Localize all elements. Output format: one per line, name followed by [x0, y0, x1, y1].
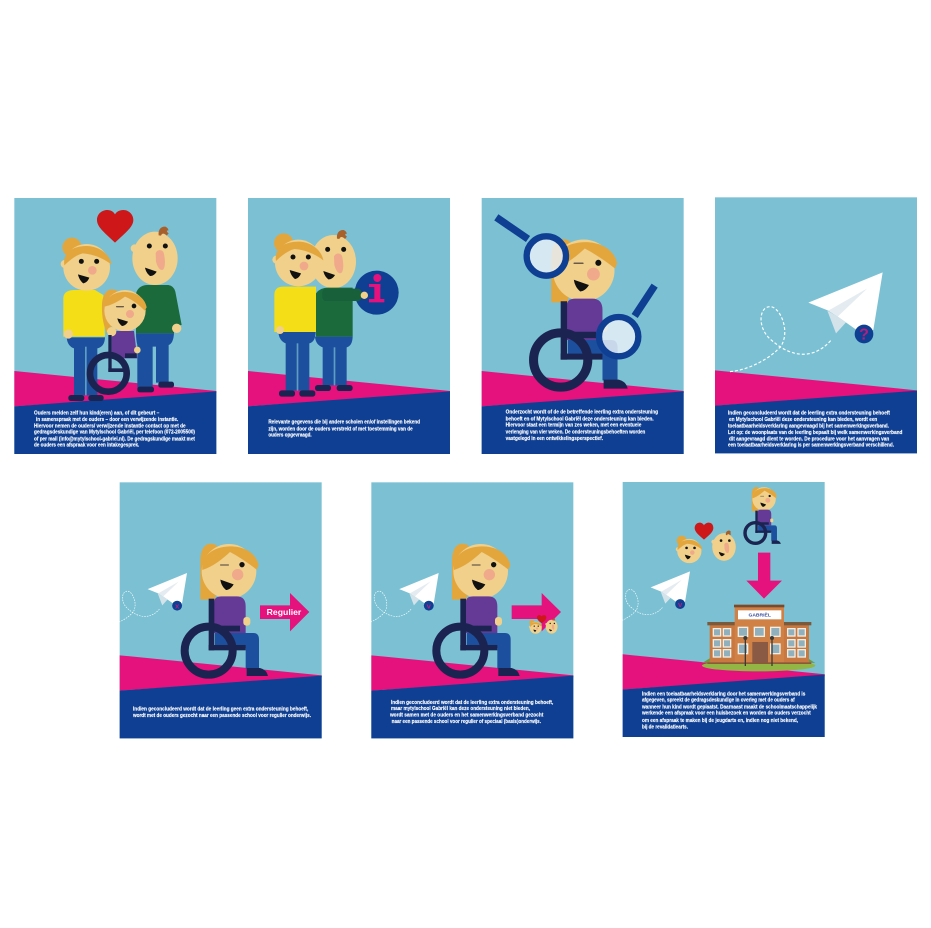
icon: heart — [97, 210, 133, 243]
text block — [34, 410, 195, 449]
text block: gedragsdeskundige van Mytylschool Gabriël, per telefoon (072-2005500) — [34, 430, 195, 436]
icon: parents with heart — [529, 615, 558, 634]
arrow: regulier: Regulier — [267, 607, 302, 617]
mother figure — [272, 233, 323, 397]
child in wheelchair — [185, 544, 268, 676]
icon: paper plane with question mark — [730, 272, 883, 372]
text block: wordt met de ouders gezocht naar een passende school voor regulier onderwijs. — [132, 713, 311, 719]
panel 5: regular education — [106, 482, 322, 738]
text block: bij de revalidatiearts. — [642, 724, 688, 730]
text block — [389, 700, 554, 725]
text block — [728, 411, 903, 449]
icon: paper plane with cross: x — [175, 602, 180, 611]
child in wheelchair — [534, 239, 628, 389]
text block: de ouders een afspraak voor een intakegesprek. — [34, 443, 140, 449]
child in wheelchair — [90, 289, 147, 392]
text block: Relevante gegevens die bij andere scholen en/of instellingen bekend — [268, 420, 420, 426]
text block: naar een passende school voor regulier of speciaal (basis)onderwijs. — [392, 719, 541, 725]
panel 3: research into support needs — [482, 198, 684, 454]
text block: wordt samen met de ouders en het samenwerkingsverband gezocht — [389, 713, 543, 719]
icon: parents with heart — [676, 523, 736, 563]
child in wheelchair — [436, 544, 520, 676]
text block — [268, 420, 420, 439]
text block: Indien geconcludeerd wordt dat de leerling geen extra ondersteuning behoeft, — [133, 707, 309, 713]
icon: info symbol — [369, 274, 384, 302]
mother figure — [61, 238, 112, 401]
text block: wanneer hun kind wordt geplaatst. Daarnaast maakt de schoolmaatschappelijk — [641, 705, 818, 711]
panel 1: parents register child — [14, 198, 216, 454]
text block: zijn, worden door de ouders verstrekt of met toestemming van de — [268, 426, 413, 432]
text block: afgegeven, spreekt de gedragsdeskundige in overleg met de ouders af — [642, 698, 795, 704]
school building — [702, 605, 815, 671]
text block: ouders opgevraagd. — [268, 433, 312, 439]
text block: Ouders melden zelf hun kind(eren) aan, of dit gebeurt – — [34, 410, 159, 416]
text block: of per mail (info@mytylschool-gabriel.nl). De gedragskundige maakt met — [34, 437, 195, 443]
icon: paper plane with check: v — [427, 602, 432, 611]
arrow — [512, 593, 561, 631]
text block: Indien een toelaatbaarheidsverklaring door het samenwerkingsverband is — [642, 692, 805, 698]
text block: een toelaatbaarheidsverklaring is per samenwerkingsverband verschillend. — [728, 443, 894, 449]
text block: Indien geconcludeerd wordt dat de leerling extra ondersteuning behoeft — [728, 411, 890, 417]
panel 2: relevant data gathered — [248, 198, 450, 454]
text block — [641, 692, 818, 730]
text block: Onderzocht wordt of de de betreffende leerling extra ondersteuning — [506, 410, 658, 416]
text block: in samenspraak met de ouders – door een verwijzende instantie. — [36, 417, 179, 423]
father figure — [131, 227, 182, 392]
icon: magnifying glass left — [496, 217, 566, 276]
school building: GABRIËL — [748, 612, 771, 619]
arrow: down — [746, 553, 782, 599]
icon: magnifying glass right — [599, 286, 655, 356]
text block: en Mytylschool Gabriël deze ondersteuning kan bieden, wordt een — [729, 417, 878, 423]
text block: behoeft en of Mytylschool Gabriël deze ondersteuning kan bieden. — [506, 416, 654, 422]
text block: werkende een afspraak voor een huisbezoek en worden de ouders verzocht — [641, 711, 811, 717]
text block: Indien geconcludeerd wordt dat de leerling extra ondersteuning behoeft, — [391, 700, 554, 706]
text block: verlenging van vier weken. De ondersteuningsbehoeften worden — [506, 430, 646, 436]
text block — [132, 707, 311, 719]
arrow: regulier — [260, 593, 309, 631]
text block: Hiervoor nemen de ouders/ verwijzende instantie contact op met de — [34, 424, 186, 430]
father with info sign — [309, 230, 399, 391]
text block — [506, 410, 658, 442]
icon: paper plane with question mark: ? — [859, 327, 869, 344]
child in wheelchair — [745, 487, 781, 544]
text block: dit aangevraagd dient te worden. De procedure voor het aanvragen van — [729, 437, 890, 443]
panel 6: special education — [358, 482, 573, 738]
panel 4: declaration requested — [715, 197, 917, 453]
text block: maar mytylschool Gabriël kan deze ondersteuning niet bieden, — [391, 706, 530, 712]
icon: paper plane with check: v — [678, 600, 683, 609]
icon: paper plane with check — [609, 571, 690, 624]
text block: om een afspraak te maken bij de jeugdarts en, indien nog niet bekend, — [642, 718, 798, 724]
icon: paper plane with check — [358, 573, 439, 626]
panel 7: placement at school — [609, 482, 825, 737]
text block: toelaatbaarheidsverklaring aangevraagd bij het samenwerkingsverband. — [728, 424, 889, 430]
text block: Hiervoor staat een termijn van zes weken, met een eventuele — [506, 423, 641, 429]
text block: vastgelegd in een ontwikkelingsperspectief. — [506, 436, 603, 442]
icon: paper plane with cross — [106, 573, 187, 626]
